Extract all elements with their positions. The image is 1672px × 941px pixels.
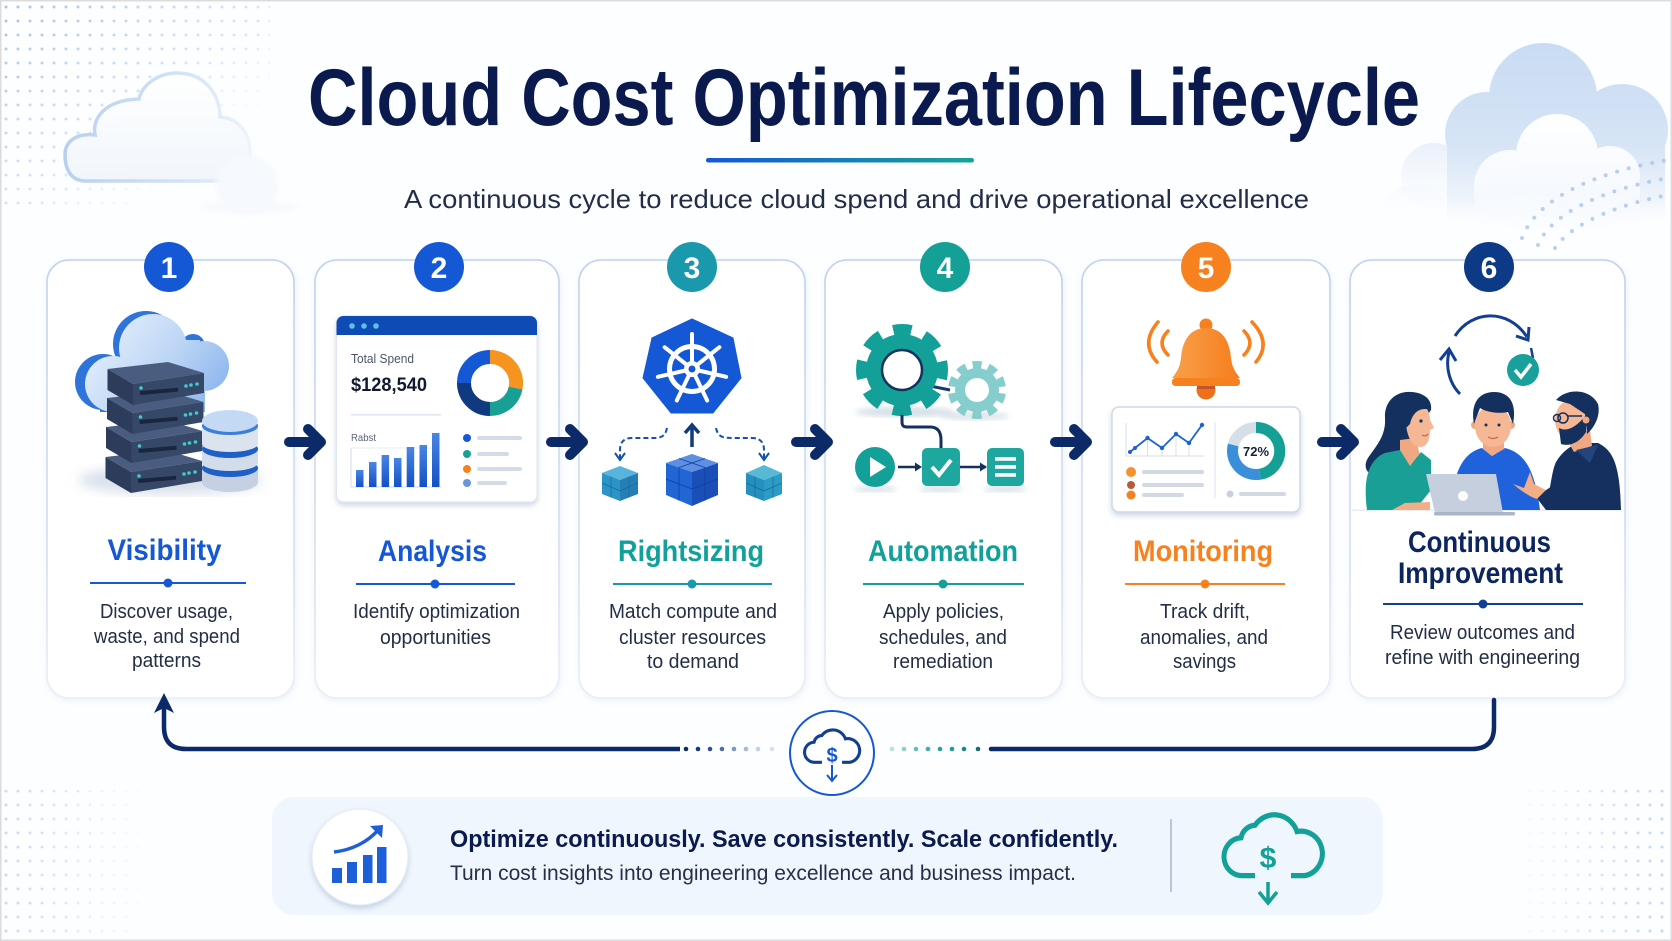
description: schedules, and <box>879 627 1007 649</box>
title: Cloud Cost Optimization Lifecycle <box>308 53 1420 143</box>
arrow: feedback loop <box>154 693 1494 751</box>
badge 6 <box>1464 242 1514 292</box>
description: Apply policies, <box>883 601 1004 623</box>
description: opportunities <box>380 627 491 649</box>
callout text: Turn cost insights into engineering excellence and business impact. <box>450 862 1076 885</box>
icon: cloud servers and database <box>75 311 262 494</box>
badge 3: 3 <box>684 252 700 285</box>
icon: cycle arrows and check <box>1440 316 1539 394</box>
divider <box>1125 580 1285 588</box>
card 6: Continuous Improvement <box>1350 242 1625 698</box>
icon: dashboard: Rabst <box>351 433 376 444</box>
badge 2: 2 <box>431 252 447 285</box>
icon: bell <box>1149 318 1263 400</box>
legend <box>463 434 522 487</box>
badge 2 <box>414 242 464 292</box>
heading: Automation <box>868 535 1018 568</box>
panel: bottom callout <box>272 797 1383 915</box>
description <box>1140 601 1268 673</box>
card 3: Rightsizing <box>579 242 805 698</box>
donut chart <box>464 357 516 409</box>
card 5: Monitoring <box>1082 242 1330 698</box>
card 2: Analysis <box>315 242 559 698</box>
donut: 72% <box>1232 427 1280 475</box>
divider <box>90 578 246 588</box>
decoration: right cloud <box>1385 43 1668 248</box>
description: Track drift, <box>1160 601 1250 623</box>
divider <box>356 580 515 588</box>
badge 5 <box>1181 242 1231 292</box>
icon: team at laptop <box>1352 391 1621 516</box>
icon: cloud savings medallion: $ <box>826 745 838 767</box>
icon: teal cloud with dollar <box>1224 815 1322 903</box>
arrow: step 1 to 2 <box>289 429 321 455</box>
icon: dashboard: $128,540 <box>351 375 427 396</box>
icon: dashboard <box>336 316 537 502</box>
icon: growth chart <box>312 809 408 905</box>
icon: dashboard: Total Spend <box>351 352 414 366</box>
icon: cloud savings medallion <box>790 711 874 795</box>
arrows: scaling paths <box>615 425 769 460</box>
heading <box>1398 526 1563 590</box>
donut: 72%: 72% <box>1243 444 1269 459</box>
description <box>609 601 777 673</box>
icon: monitoring dashboard <box>1112 407 1300 512</box>
description: refine with engineering <box>1385 647 1580 669</box>
badge 4: 4 <box>937 252 954 285</box>
divider <box>863 580 1024 588</box>
icon: automation flow <box>853 415 1027 492</box>
divider <box>613 580 772 588</box>
description <box>1385 622 1580 669</box>
card 4: Automation <box>825 242 1062 698</box>
badge 3 <box>667 242 717 292</box>
person: right man <box>1513 391 1621 510</box>
title underline <box>706 158 974 162</box>
description: anomalies, and <box>1140 627 1268 649</box>
badge 5: 5 <box>1198 252 1214 285</box>
description: Match compute and <box>609 601 777 623</box>
description: to demand <box>647 651 739 673</box>
heading: Improvement <box>1398 557 1563 590</box>
arrow: step 5 to 6 <box>1322 429 1354 455</box>
description: remediation <box>893 651 993 673</box>
description: savings <box>1173 651 1236 673</box>
description <box>93 601 240 672</box>
callout heading: Optimize continuously. Save consistently. Scale confidently. <box>450 826 1118 853</box>
bar chart <box>351 433 441 487</box>
divider <box>1383 600 1583 608</box>
heading: Visibility <box>108 534 222 567</box>
person: middle man <box>1452 392 1540 510</box>
icon: cubes <box>602 454 782 506</box>
decoration: left cloud <box>65 73 300 215</box>
description: patterns <box>132 650 201 672</box>
description: cluster resources <box>619 627 766 649</box>
badge 6: 6 <box>1481 252 1497 285</box>
arrow: step 3 to 4 <box>796 429 828 455</box>
icon: teal cloud with dollar: $ <box>1260 842 1277 875</box>
laptop <box>1426 474 1515 516</box>
subtitle: A continuous cycle to reduce cloud spend and drive operational excellence <box>404 184 1309 214</box>
person: woman <box>1366 392 1434 510</box>
description: Discover usage, <box>100 601 233 623</box>
badge 1: 1 <box>161 252 177 285</box>
description <box>353 601 520 649</box>
card 1: Visibility <box>47 242 294 698</box>
badge 1 <box>144 242 194 292</box>
arrow: step 4 to 5 <box>1055 429 1087 455</box>
description: Identify optimization <box>353 601 520 623</box>
heading: Monitoring <box>1133 535 1273 568</box>
description: waste, and spend <box>93 626 240 648</box>
badge 4 <box>920 242 970 292</box>
icon: gears <box>855 330 1010 420</box>
server stack <box>106 362 204 493</box>
heading: Rightsizing <box>618 535 764 568</box>
heading: Continuous <box>1408 526 1551 559</box>
icon: kubernetes wheel <box>643 319 741 413</box>
description: Review outcomes and <box>1390 622 1575 644</box>
arrow: step 2 to 3 <box>551 429 583 455</box>
heading: Analysis <box>378 535 487 568</box>
description <box>879 601 1007 673</box>
database cylinder <box>202 410 258 492</box>
